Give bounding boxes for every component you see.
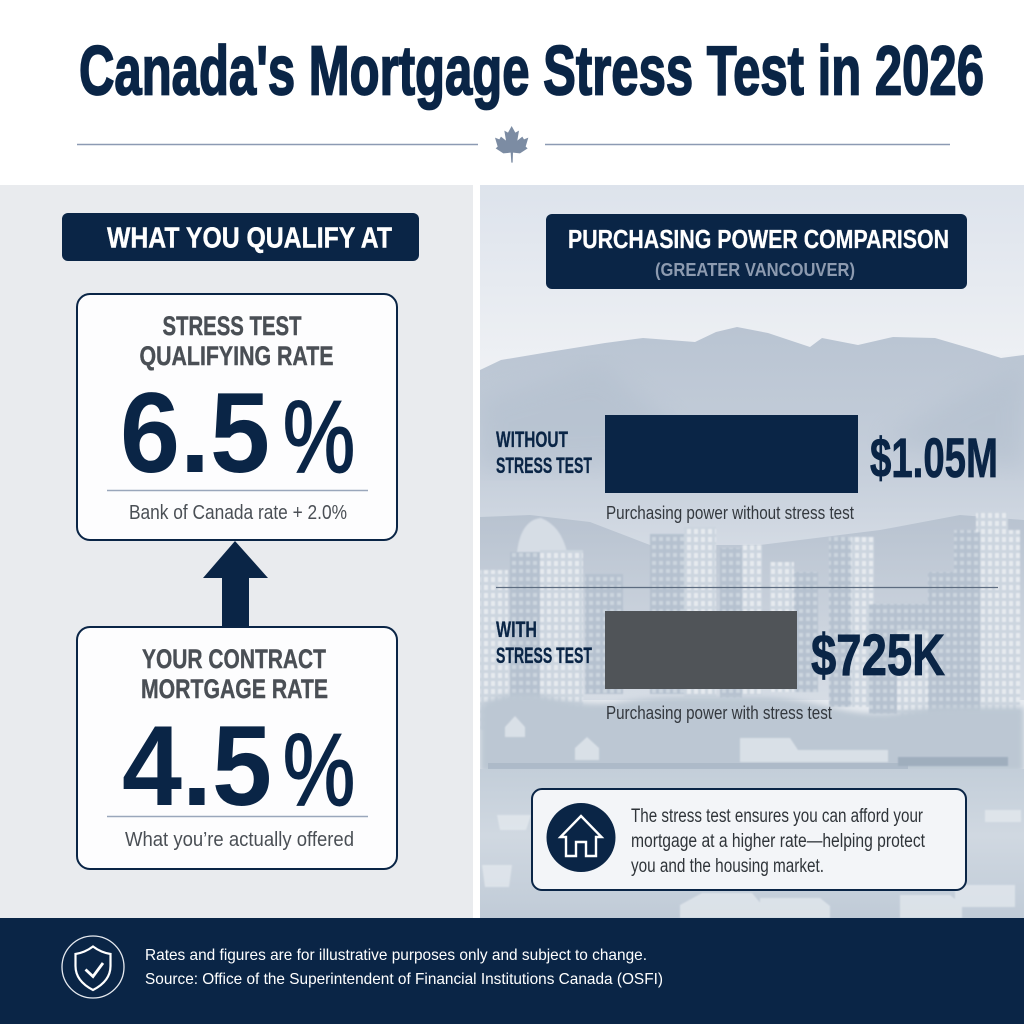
footer disclaimer and source [145, 947, 663, 988]
footer disclaimer and source: Rates and figures are for illustrative purposes only and subject to change. [145, 947, 647, 964]
row label: STRESS TEST [496, 453, 592, 478]
row label: WITHOUT [496, 427, 568, 452]
callout text [631, 806, 926, 877]
card heading [140, 311, 334, 371]
title divider with maple leaf [77, 126, 950, 163]
contract rate value: % [283, 713, 355, 827]
caption: Purchasing power without stress test [606, 502, 854, 523]
right panel heading: PURCHASING POWER COMPARISON [568, 224, 949, 254]
card heading: YOUR CONTRACT [142, 644, 326, 674]
qualifying rate value: % [283, 380, 355, 494]
card heading: MORTGAGE RATE [141, 674, 328, 704]
footer disclaimer and source: Source: Office of the Superintendent of Financial Institutions Canada (OSFI) [145, 971, 663, 988]
card heading: STRESS TEST [162, 311, 302, 341]
arrow: contract rate up to qualifying rate [203, 541, 268, 628]
left panel heading: WHAT YOU QUALIFY AT [107, 222, 392, 254]
callout: why the stress test matters [532, 789, 966, 890]
callout text: mortgage at a higher rate—helping protect [631, 831, 926, 852]
row label [496, 617, 592, 668]
card heading: QUALIFYING RATE [140, 341, 334, 371]
icon: shield with check [62, 936, 124, 998]
qualifying rate value [120, 370, 355, 497]
caption: Purchasing power with stress test [606, 702, 832, 723]
right panel heading [546, 214, 967, 289]
qualifying rate note: Bank of Canada rate + 2.0% [129, 502, 347, 524]
contract rate value [122, 703, 355, 830]
left panel background [0, 185, 473, 918]
footer [0, 918, 1024, 1024]
card heading [141, 644, 328, 704]
bar chart row: with stress test [496, 611, 945, 723]
contract rate value: 4.5 [122, 703, 272, 830]
callout text: The stress test ensures you can afford your [631, 806, 924, 827]
contract rate note: What you’re actually offered [125, 829, 354, 851]
row label: STRESS TEST [496, 643, 592, 668]
row label: WITH [496, 617, 537, 642]
right panel heading: (GREATER VANCOUVER) [655, 260, 855, 280]
bar chart row: without stress test [496, 415, 998, 523]
panel: contract mortgage rate card [77, 627, 397, 869]
icon: maple leaf [495, 126, 528, 163]
value: $725K [811, 623, 945, 688]
panel: stress test qualifying rate card [77, 294, 397, 540]
icon: house [546, 803, 616, 872]
callout text: you and the housing market. [631, 856, 824, 877]
qualifying rate value: 6.5 [120, 370, 270, 497]
bar [605, 415, 858, 493]
row label [496, 427, 592, 478]
bar [605, 611, 797, 689]
left panel heading [62, 213, 419, 261]
panel: Vancouver skyline backdrop [480, 185, 1024, 918]
